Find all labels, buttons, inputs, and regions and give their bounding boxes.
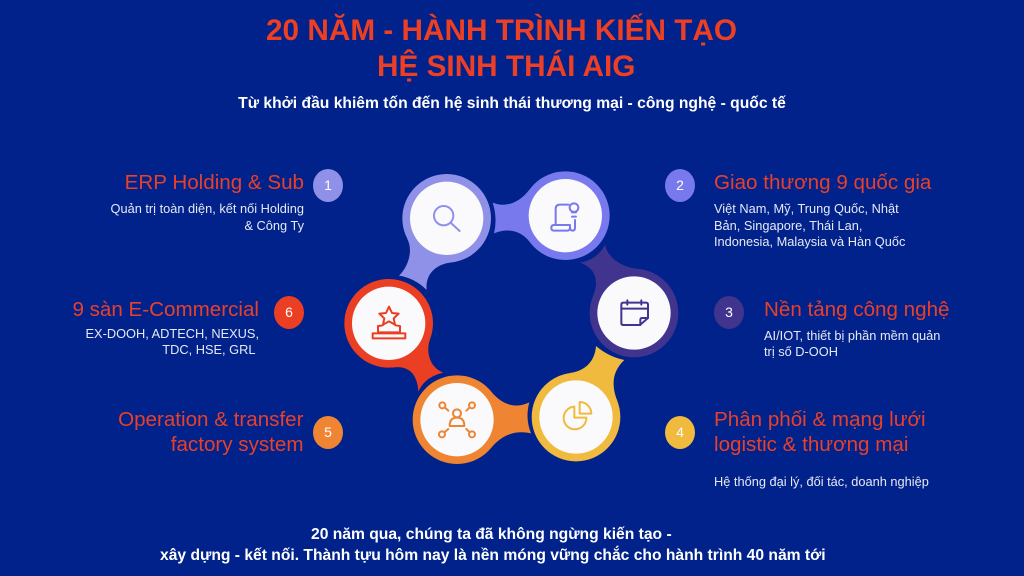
icon: pie chart xyxy=(564,402,591,429)
closing statement: xây dựng - kết nối. Thành tựu hôm nay là nền móng vững chắc cho hành trình 40 năm tới xyxy=(160,547,826,564)
subtitle: Từ khởi đầu khiêm tốn đến hệ sinh thái thương mại - công nghệ - quốc tế xyxy=(238,95,786,112)
badge 1 xyxy=(313,169,343,202)
badge 3 xyxy=(714,296,744,329)
badge 2: 2 xyxy=(676,177,684,193)
item 6: 9 sàn E-Commercial xyxy=(72,298,259,357)
title xyxy=(266,14,737,83)
badge 5 xyxy=(313,416,343,449)
item 4: Phân phối & mạng lưới xyxy=(714,408,929,489)
icon: scroll with light bulb xyxy=(551,203,578,231)
item 2: Giao thương 9 quốc gia xyxy=(714,171,932,249)
closing statement xyxy=(160,526,826,564)
item 3: Nền tảng công nghệ: Nền tảng công nghệ xyxy=(764,298,950,321)
badge 6: 6 xyxy=(285,304,293,320)
title: 20 NĂM - HÀNH TRÌNH KIẾN TẠO xyxy=(266,14,737,47)
item 1: ERP Holding & Sub: Quản trị toàn diện, kết nối Holding xyxy=(110,201,304,216)
node 6: award xyxy=(344,279,443,392)
item 1: ERP Holding & Sub: ERP Holding & Sub xyxy=(125,171,304,194)
badge 2 xyxy=(665,169,695,202)
item 2: Giao thương 9 quốc gia: Indonesia, Malaysia và Hàn Quốc xyxy=(714,234,905,249)
node 3: calendar xyxy=(580,245,678,357)
title: HỆ SINH THÁI AIG xyxy=(377,50,635,83)
node 5: network xyxy=(413,375,531,464)
badge 4: 4 xyxy=(676,424,684,440)
closing statement: 20 năm qua, chúng ta đã không ngừng kiến tạo - xyxy=(311,526,672,543)
badge 6 xyxy=(274,296,304,329)
item 3: Nền tảng công nghệ: trị số D-OOH xyxy=(764,344,838,359)
node 2: idea document xyxy=(493,171,610,260)
item 1: ERP Holding & Sub: & Công Ty xyxy=(244,218,304,232)
item 2: Giao thương 9 quốc gia: Giao thương 9 quốc gia xyxy=(714,171,931,194)
item 2: Giao thương 9 quốc gia: Bản, Singapore, Thái Lan, xyxy=(714,218,862,232)
item 5: Operation & transfer: Operation & transfer xyxy=(118,408,304,431)
item 6: 9 sàn E-Commercial: TDC, HSE, GRL xyxy=(162,342,255,357)
item 6: 9 sàn E-Commercial: EX-DOOH, ADTECH, NEXUS, xyxy=(86,326,259,340)
icon: person network xyxy=(439,402,475,437)
icon: calendar xyxy=(621,300,648,325)
item 6: 9 sàn E-Commercial: 9 sàn E-Commercial xyxy=(72,298,259,321)
item 3: Nền tảng công nghệ: AI/IOT, thiết bị phần mềm quản xyxy=(764,328,940,342)
item 4: Phân phối & mạng lưới: Phân phối & mạng lưới xyxy=(714,408,926,431)
badge 4 xyxy=(665,416,695,449)
icon: magnifier xyxy=(434,206,460,231)
item 5: Operation & transfer: factory system xyxy=(171,433,304,456)
item 5: Operation & transfer xyxy=(118,408,304,456)
badge 1: 1 xyxy=(324,177,332,193)
item 2: Giao thương 9 quốc gia: Việt Nam, Mỹ, Trung Quốc, Nhật xyxy=(714,201,899,216)
item 3: Nền tảng công nghệ xyxy=(764,298,950,359)
item 1: ERP Holding & Sub xyxy=(110,171,304,232)
node 4: pie chart xyxy=(532,346,624,461)
item 4: Phân phối & mạng lưới: logistic & thương mại xyxy=(714,433,908,456)
badge 5: 5 xyxy=(324,424,332,440)
item 4: Phân phối & mạng lưới: Hệ thống đại lý, đối tác, doanh nghiệp xyxy=(714,474,929,489)
badge 3: 3 xyxy=(725,304,733,320)
node 1: search xyxy=(399,174,491,290)
icon: star on podium xyxy=(373,307,405,338)
